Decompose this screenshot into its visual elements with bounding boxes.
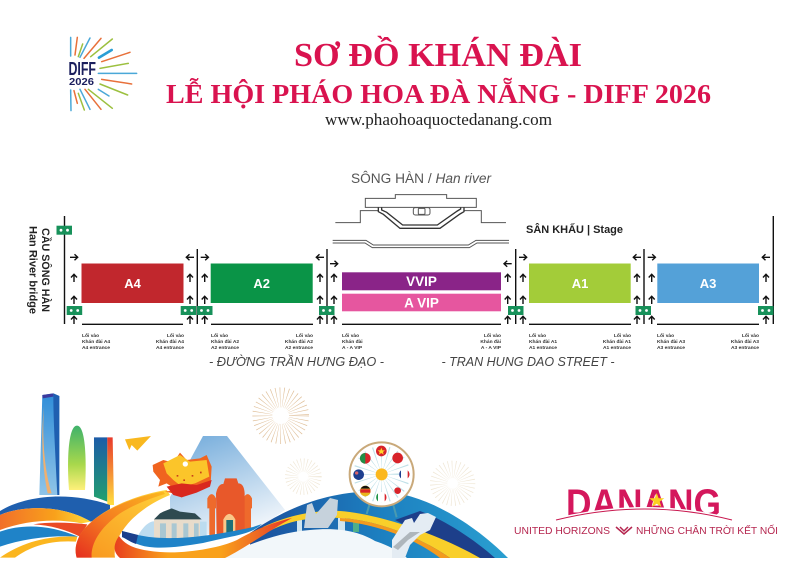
entrance captions: A2 entrance (211, 345, 239, 351)
entrance captions: Lối vào (614, 332, 631, 339)
subtitle: LỄ HỘI PHÁO HOA ĐÀ NẴNG - DIFF 2026 (166, 78, 711, 109)
illustration: hands (304, 498, 436, 558)
block A2 (211, 264, 313, 303)
entrance captions: A1 entrance (529, 345, 557, 351)
entrance captions: A2 entrance (285, 345, 313, 351)
bridge label (26, 226, 52, 314)
entrance captions: Lối vào (742, 332, 759, 339)
website: www.phaohoaquoctedanang.com (325, 110, 552, 129)
entrance captions: A3 entrance (657, 345, 685, 351)
entrance captions: A4 entrance (156, 345, 184, 351)
title: SƠ ĐỒ KHÁN ĐÀI (294, 35, 582, 74)
entrance captions: A - A VIP (481, 345, 502, 351)
block A2: A2 (253, 276, 270, 291)
entrance arrows (70, 254, 770, 324)
bridge label: Han River bridge (26, 226, 38, 314)
entrance captions: Lối vào (167, 332, 184, 339)
entrance captions: Khán đài A3 (657, 339, 685, 345)
entrance captions: Lối vào (342, 332, 359, 339)
block A3 (657, 264, 759, 303)
entrance captions: Khán đài A1 (603, 339, 631, 345)
DANANG logo: DANANG (566, 482, 721, 526)
entrance captions: Lối vào (484, 332, 501, 339)
entrance captions: A4 entrance (82, 345, 110, 351)
river label: SÔNG HÀN / Han river (351, 171, 492, 186)
block A VIP (342, 294, 501, 311)
entrance captions: Lối vào (82, 332, 99, 339)
stage label: SÂN KHẤU | Stage (526, 223, 623, 236)
vertical dividers (64, 216, 773, 324)
entrance captions: Khán đài A3 (731, 339, 759, 345)
block A3: A3 (700, 276, 716, 291)
entrance captions: Lối vào (529, 332, 546, 339)
entrance captions: Khán đài A4 (156, 339, 184, 345)
entrance captions (82, 332, 759, 351)
logo: DIFF 2026 firework (68, 37, 137, 111)
entrance captions: A - A VIP (342, 345, 363, 351)
block VVIP: VVIP (406, 274, 437, 289)
street name English: - TRAN HUNG DAO STREET - (442, 354, 615, 369)
entrance captions: Khán đài A2 (285, 339, 313, 345)
illustration: left ribbons (0, 490, 170, 558)
entrance captions: A3 entrance (731, 345, 759, 351)
tagline: NHỮNG CHÂN TRỜI KẾT NỐI (636, 523, 778, 537)
logo: DIFF 2026 firework: DIFF (68, 58, 96, 79)
illustration: lower ribbons (115, 518, 292, 558)
entrance captions: Khán đài (480, 339, 502, 345)
entrance captions: Lối vào (657, 332, 674, 339)
illustration: mountain backdrop (170, 436, 285, 540)
tagline (514, 523, 778, 537)
entrance captions: Lối vào (211, 332, 228, 339)
illustration: Cham tower (207, 478, 252, 537)
entrance captions: Lối vào (296, 332, 313, 339)
green gate badges (56, 226, 774, 315)
block VVIP (342, 272, 501, 290)
illustration: covered bridge (138, 508, 207, 540)
fireworks (262, 397, 467, 497)
illustration: dome (213, 491, 508, 558)
block A1 (529, 264, 631, 303)
entrance captions: Khán đài A2 (211, 339, 239, 345)
block A VIP: A VIP (404, 296, 439, 310)
stage drawing (333, 195, 509, 248)
block A1: A1 (572, 276, 588, 291)
logo: DIFF 2026 firework: 2026 (69, 76, 94, 88)
illustration: dragon head (153, 453, 212, 497)
illustration: towers and paper plane (39, 393, 151, 505)
bridge label: CẦU SÔNG HÀN (39, 228, 52, 312)
tagline: UNITED HORIZONS (514, 525, 610, 537)
ferris wheel with flags (350, 442, 414, 517)
block A4: A4 (124, 276, 142, 291)
entrance captions: Khán đài (342, 339, 363, 345)
block A4 (82, 264, 184, 303)
entrance captions: A1 entrance (603, 345, 631, 351)
entrance captions: Khán đài A1 (529, 339, 557, 345)
street name Vietnamese: - ĐƯỜNG TRẦN HƯNG ĐẠO - (209, 354, 385, 369)
entrance captions: Khán đài A4 (82, 339, 110, 345)
